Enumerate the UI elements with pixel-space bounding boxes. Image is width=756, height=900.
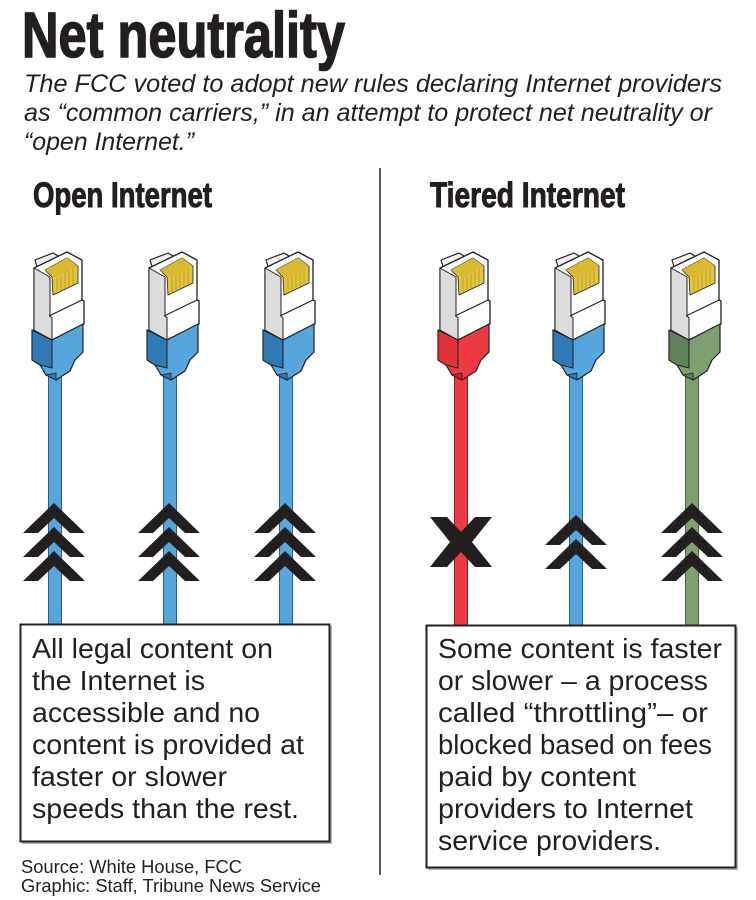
- arrows: cable 6 triple chevron: [661, 503, 723, 581]
- subtitle: [24, 70, 722, 156]
- arrows: cable 2 triple chevron: [138, 503, 200, 581]
- callout: tiered internet: [426, 626, 738, 870]
- callout: open internet: All legal content on: [32, 633, 273, 664]
- subtitle: The FCC voted to adopt new rules declaring Internet providers: [24, 70, 722, 98]
- callout: tiered internet: or slower – a process: [438, 665, 708, 696]
- callout: tiered internet: blocked based on fees: [438, 729, 712, 760]
- arrows: cable 3 triple chevron: [254, 503, 316, 581]
- callout: open internet: the Internet is: [32, 665, 205, 696]
- heading: open internet: Open Internet: [33, 176, 212, 215]
- cable 1: blue open: [32, 252, 84, 626]
- arrows: cable 5 double chevron: [545, 515, 607, 569]
- cable 5: blue tiered: [553, 252, 605, 626]
- title: Net neutrality: [22, 0, 345, 71]
- source credit: Source: White House, FCC: [21, 857, 242, 877]
- callout: tiered internet: paid by content: [438, 761, 636, 792]
- icon: blocked X: [430, 517, 492, 567]
- callout: open internet: speeds than the rest.: [32, 793, 299, 824]
- cable 4: red blocked: [438, 252, 490, 626]
- callout: tiered internet: providers to Internet: [438, 793, 693, 824]
- cable 3: blue open: [263, 252, 315, 626]
- callout: open internet: content is provided at: [32, 729, 304, 760]
- arrows: cable 1 triple chevron: [23, 503, 85, 581]
- callout: open internet: [20, 624, 332, 844]
- subtitle: “open Internet.”: [24, 128, 196, 156]
- source credit: Graphic: Staff, Tribune News Service: [21, 876, 321, 896]
- source credit: [21, 857, 321, 896]
- callout: tiered internet: Some content is faster: [438, 633, 722, 664]
- subtitle: as “common carriers,” in an attempt to protect net neutrality or: [24, 99, 714, 127]
- callout: tiered internet: called “throttling”– or: [438, 697, 708, 728]
- heading: tiered internet: Tiered Internet: [430, 176, 625, 215]
- callout: open internet: accessible and no: [32, 697, 260, 728]
- cable 2: blue open: [147, 252, 199, 626]
- callout: tiered internet: service providers.: [438, 825, 661, 856]
- cable 6: green tiered: [669, 252, 721, 626]
- callout: open internet: faster or slower: [32, 761, 227, 792]
